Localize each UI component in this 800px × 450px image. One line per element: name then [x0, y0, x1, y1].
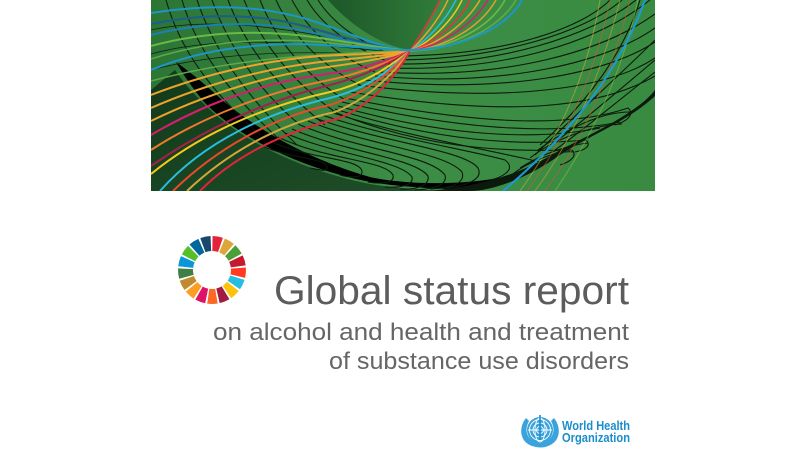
blue line right — [503, 0, 645, 191]
header artwork: woven coloured and black lines on green — [151, 0, 655, 191]
logo text: World Health — [562, 418, 630, 433]
logo text — [562, 418, 630, 445]
dark lower left zone — [151, 70, 445, 191]
green background — [151, 0, 655, 191]
subtitle: of substance use disorders — [329, 348, 629, 375]
dark circle top centre — [328, 0, 440, 50]
title: Global status report — [274, 269, 629, 313]
black band — [176, 62, 525, 189]
logo text: Organization — [562, 430, 630, 445]
WHO logo — [521, 415, 630, 448]
coloured lines converging at focal point — [151, 0, 522, 191]
black line family sweeping right — [262, 0, 655, 190]
black line mesh upper left — [151, 0, 400, 145]
subtitle — [213, 319, 629, 375]
SDG colour wheel — [175, 233, 249, 307]
subtitle: on alcohol and health and treatment — [213, 319, 629, 346]
faded coloured lines right — [520, 0, 638, 191]
report cover — [151, 0, 655, 448]
icon: WHO emblem — [521, 415, 559, 448]
